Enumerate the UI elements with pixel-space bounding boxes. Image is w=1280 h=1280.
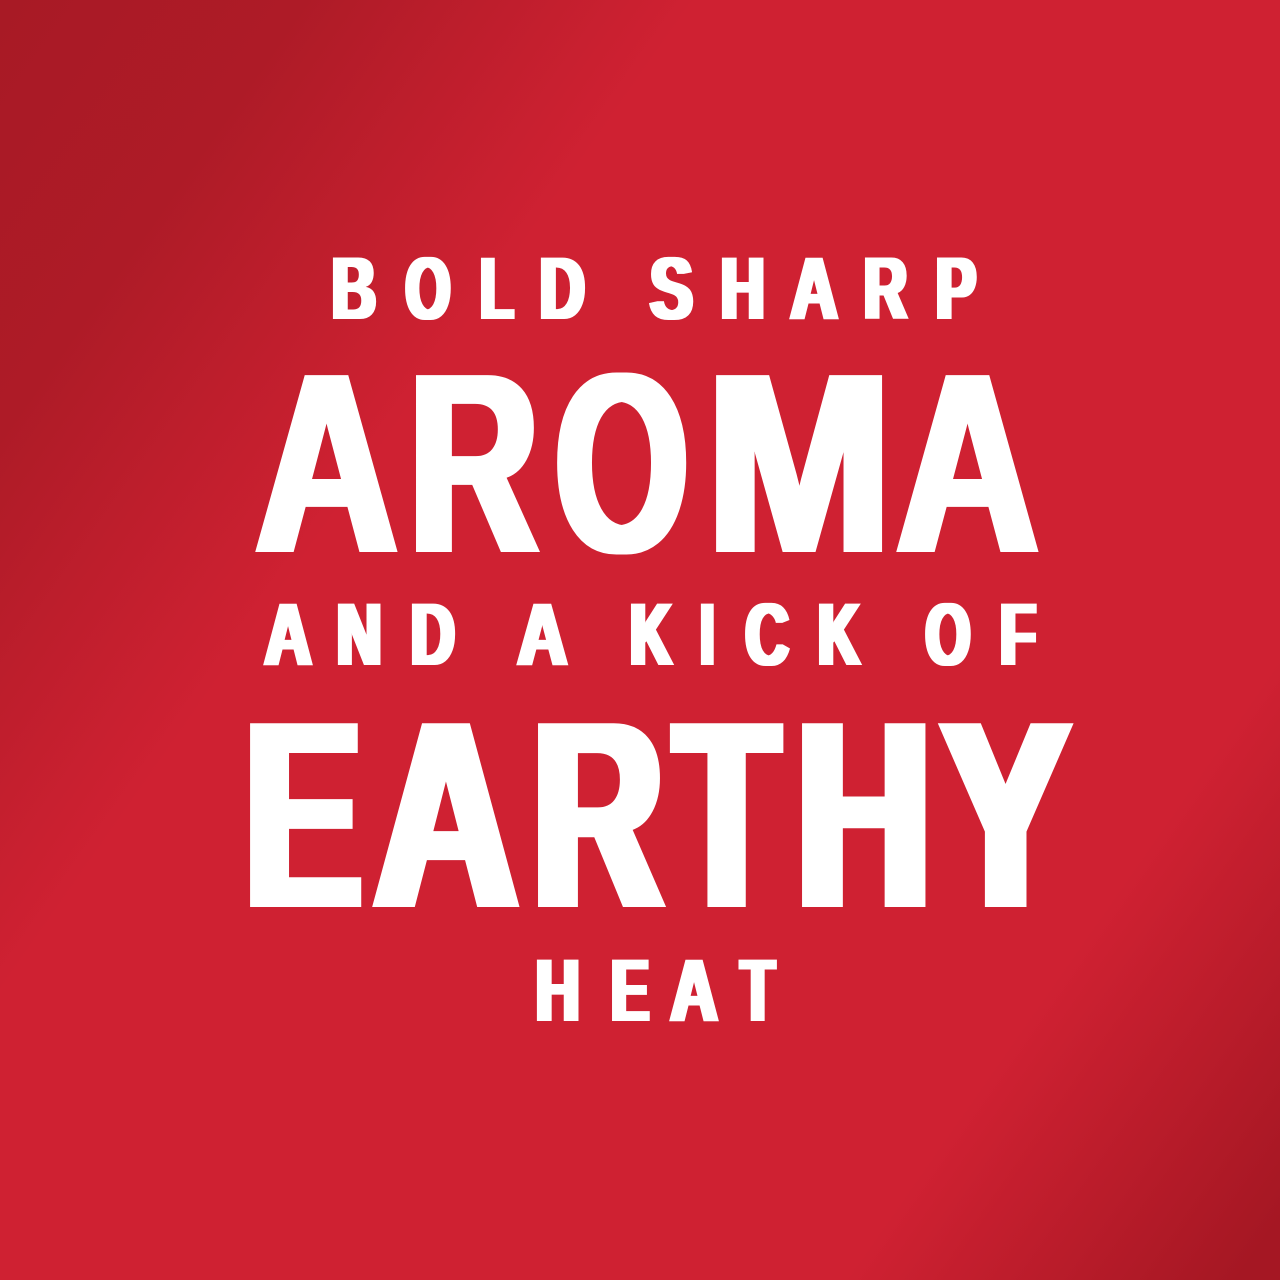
text line: AND A KICK OF: O (926, 584, 970, 684)
text line: AND A KICK OF: C (746, 584, 789, 684)
text line: HEAT: A (670, 940, 718, 1040)
text line: BOLD SHARP: L (480, 238, 513, 338)
text line: EARTHY: A (374, 665, 518, 964)
text line: BOLD SHARP: H (721, 238, 765, 338)
text line: AND A KICK OF: D (411, 584, 455, 684)
text line: BOLD SHARP: P (936, 238, 976, 338)
text line: EARTHY: E (246, 665, 361, 964)
text line: AND A KICK OF: A (518, 584, 565, 684)
text line: AROMA: A (896, 320, 1039, 607)
text line: AND A KICK OF: I (701, 584, 714, 684)
text line: BOLD SHARP: O (406, 238, 450, 338)
text line: HEAT: T (741, 940, 774, 1040)
text line: BOLD SHARP: S (650, 238, 693, 338)
text line: AND A KICK OF: N (337, 584, 382, 684)
text line: HEAT: H (536, 940, 580, 1040)
text line: AND A KICK OF: K (630, 584, 672, 684)
text line: AND A KICK OF: A (264, 584, 312, 684)
text line: EARTHY: R (533, 665, 663, 964)
text line: EARTHY: T (675, 665, 778, 964)
text line: BOLD SHARP: A (790, 238, 838, 338)
text line: BOLD SHARP: R (864, 238, 907, 338)
text line: HEAT: E (611, 940, 649, 1040)
text line: BOLD SHARP: B (332, 238, 376, 338)
text line: AROMA: R (409, 320, 539, 607)
text line: AND A KICK OF: F (1000, 584, 1036, 684)
text line: EARTHY: H (797, 665, 931, 964)
text line: AND A KICK OF: K (818, 584, 860, 684)
text line: AROMA: O (555, 320, 688, 607)
text line: EARTHY: Y (942, 665, 1070, 964)
text line: AROMA: M (706, 320, 892, 607)
text line: AROMA: A (255, 320, 398, 607)
text line: BOLD SHARP: D (540, 238, 585, 338)
